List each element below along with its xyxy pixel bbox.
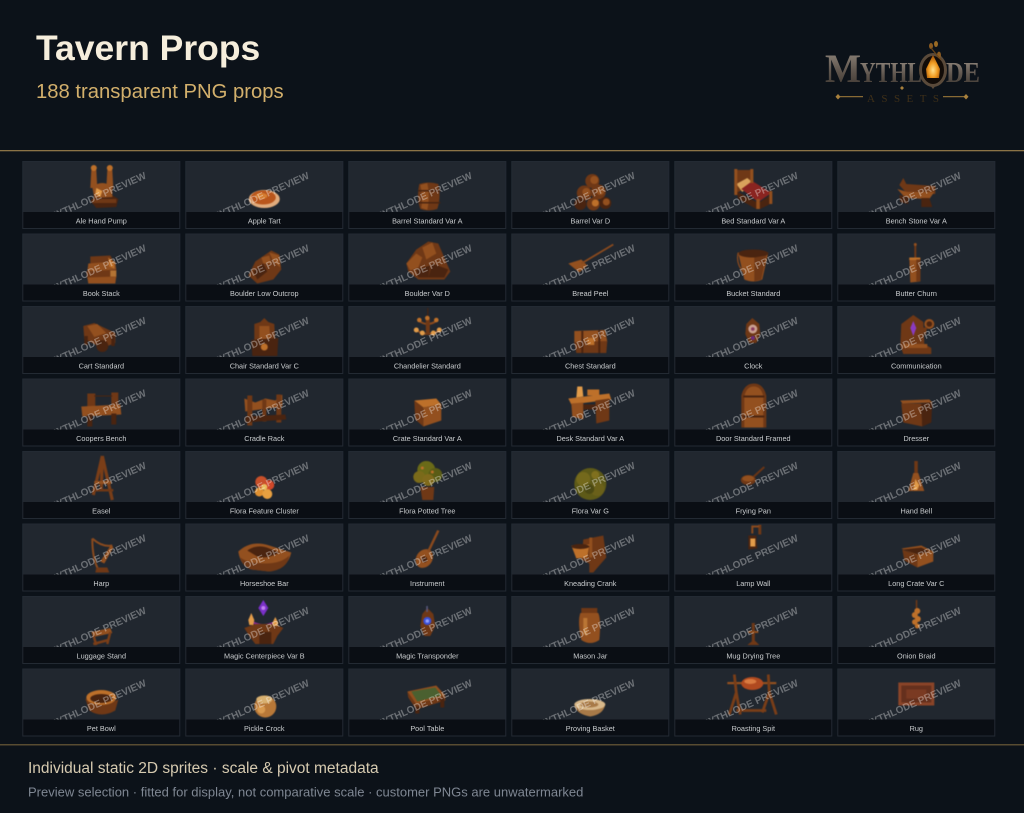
- caption: Flora Potted Tree: [399, 506, 455, 515]
- watermark: MYTHLODE PREVIEW: [863, 388, 964, 441]
- caption bar: [511, 720, 669, 736]
- footer note: Preview selection · fitted for display, not comparative scale · customer PNGs are unwatermarked: [28, 784, 583, 800]
- caption: Barrel Var D: [570, 216, 610, 225]
- watermark: MYTHLODE PREVIEW: [700, 533, 801, 586]
- watermark: MYTHLODE PREVIEW: [211, 171, 312, 224]
- icon: frying pan: [741, 467, 764, 485]
- caption: Harp: [93, 579, 109, 588]
- card: Easel: [22, 451, 180, 519]
- watermark: MYTHLODE PREVIEW: [537, 461, 638, 514]
- caption: Pet Bowl: [87, 724, 116, 733]
- card: Roasting Spit: [674, 668, 832, 736]
- icon: chest: [574, 330, 607, 353]
- caption bar: [837, 647, 995, 664]
- watermark: MYTHLODE PREVIEW: [700, 678, 801, 731]
- logo subtitle: ASSETS: [867, 93, 939, 105]
- card: Cradle Rack: [185, 378, 343, 446]
- icon: flora cluster: [255, 476, 274, 499]
- caption bar: [511, 357, 669, 374]
- caption bar: [511, 647, 669, 664]
- card: Coopers Bench: [22, 378, 180, 446]
- card: Mug Drying Tree: [674, 596, 832, 664]
- icon: book stack: [86, 256, 116, 284]
- icon: hand bell: [908, 461, 924, 491]
- card: Communication: [837, 306, 995, 374]
- icon: desk: [568, 386, 611, 424]
- caption: Horseshoe Bar: [240, 579, 289, 588]
- card: Cart Standard: [22, 306, 180, 374]
- icon: magic transponder: [420, 606, 435, 636]
- card: Desk Standard Var A: [511, 378, 669, 446]
- icon: bucket: [738, 250, 768, 282]
- caption bar: [22, 212, 180, 229]
- caption bar: [348, 574, 506, 592]
- logo wordmark: [825, 46, 980, 91]
- watermark: MYTHLODE PREVIEW: [211, 533, 312, 586]
- card: Clock: [674, 306, 832, 374]
- card: Bucket Standard: [674, 234, 832, 302]
- caption: Bread Peel: [572, 289, 609, 298]
- footer divider: [0, 744, 1024, 745]
- watermark: MYTHLODE PREVIEW: [374, 243, 475, 296]
- caption: Butter Churn: [896, 289, 937, 298]
- icon: roasting spit: [727, 674, 776, 714]
- caption: Boulder Var D: [405, 289, 450, 298]
- caption: Magic Centerpiece Var B: [224, 651, 305, 660]
- watermark: MYTHLODE PREVIEW: [48, 678, 149, 731]
- icon: cradle rack: [244, 394, 286, 426]
- icon: boulder: [248, 250, 281, 284]
- card: Door Standard Framed: [674, 378, 832, 446]
- watermark: MYTHLODE PREVIEW: [374, 388, 475, 441]
- icon: door: [741, 384, 766, 428]
- card: Magic Transponder: [348, 596, 506, 664]
- icon: onion braid: [912, 600, 921, 628]
- icon: kneading crank: [571, 536, 606, 572]
- card: Frying Pan: [674, 451, 832, 519]
- icon: ale hand pump: [90, 165, 118, 208]
- caption: Mason Jar: [573, 651, 608, 660]
- caption: Apple Tart: [248, 216, 281, 225]
- caption: Bed Standard Var A: [721, 216, 785, 225]
- icon: lute: [412, 530, 438, 571]
- icon: butter churn: [909, 243, 920, 282]
- watermark: MYTHLODE PREVIEW: [374, 316, 475, 369]
- caption: Magic Transponder: [396, 651, 459, 660]
- caption bar: [348, 647, 506, 664]
- grid of prop cards: [22, 161, 995, 736]
- icon: apple tart: [249, 190, 280, 208]
- caption bar: [22, 574, 180, 592]
- caption bar: [511, 212, 669, 229]
- watermark: MYTHLODE PREVIEW: [374, 171, 475, 224]
- icon: cart: [83, 323, 115, 352]
- card: Chest Standard: [511, 306, 669, 374]
- caption bar: [185, 647, 343, 664]
- caption bar: [185, 357, 343, 374]
- caption bar: [674, 647, 832, 664]
- icon: bed: [734, 169, 772, 209]
- card: Bench Stone Var A: [837, 161, 995, 229]
- caption: Door Standard Framed: [716, 434, 791, 443]
- card: Mason Jar: [511, 596, 669, 664]
- caption: Coopers Bench: [76, 434, 126, 443]
- card: Pool Table: [348, 668, 506, 736]
- card: Boulder Low Outcrop: [185, 234, 343, 302]
- caption: Flora Feature Cluster: [230, 506, 299, 515]
- caption: Book Stack: [83, 289, 120, 298]
- caption: Chest Standard: [565, 361, 616, 370]
- watermark: MYTHLODE PREVIEW: [537, 678, 638, 731]
- card: Long Crate Var C: [837, 524, 995, 592]
- watermark: MYTHLODE PREVIEW: [537, 606, 638, 659]
- watermark: MYTHLODE PREVIEW: [48, 461, 149, 514]
- card: Chandelier Standard: [348, 306, 506, 374]
- caption bar: [22, 284, 180, 302]
- caption: Kneading Crank: [564, 579, 617, 588]
- icon: long crate: [901, 546, 933, 568]
- watermark: MYTHLODE PREVIEW: [48, 316, 149, 369]
- watermark: MYTHLODE PREVIEW: [211, 316, 312, 369]
- icon: proving basket: [574, 699, 605, 716]
- caption bar: [837, 502, 995, 519]
- caption: Bucket Standard: [726, 289, 780, 298]
- card: Bed Standard Var A: [674, 161, 832, 229]
- caption: Hand Bell: [900, 506, 932, 515]
- watermark: MYTHLODE PREVIEW: [374, 533, 475, 586]
- caption bar: [348, 212, 506, 229]
- icon: mug drying tree: [747, 623, 759, 645]
- caption bar: [22, 647, 180, 664]
- caption: Cart Standard: [79, 361, 124, 370]
- caption bar: [674, 574, 832, 592]
- icon: communication device: [900, 315, 934, 354]
- icon: rug: [898, 682, 934, 706]
- watermark: MYTHLODE PREVIEW: [48, 533, 149, 586]
- watermark: MYTHLODE PREVIEW: [700, 388, 801, 441]
- caption: Pickle Crock: [244, 724, 285, 733]
- caption bar: [185, 284, 343, 302]
- caption: Ale Hand Pump: [76, 216, 127, 225]
- caption bar: [22, 430, 180, 446]
- caption: Dresser: [904, 434, 930, 443]
- icon: barrel stack: [574, 174, 611, 210]
- caption bar: [185, 430, 343, 446]
- caption: Pool Table: [410, 724, 444, 733]
- card: Pickle Crock: [185, 668, 343, 736]
- icon: leafy bush: [574, 468, 606, 500]
- card: Ale Hand Pump: [22, 161, 180, 229]
- caption: Long Crate Var C: [888, 579, 944, 588]
- caption bar: [674, 212, 832, 229]
- caption: Flora Var G: [572, 506, 609, 515]
- card: Lamp Wall: [674, 524, 832, 592]
- icon: bread peel: [568, 244, 613, 272]
- card: Proving Basket: [511, 668, 669, 736]
- caption bar: [511, 502, 669, 519]
- caption bar: [674, 430, 832, 446]
- icon: dresser: [900, 400, 932, 426]
- caption bar: [674, 720, 832, 736]
- watermark: MYTHLODE PREVIEW: [700, 461, 801, 514]
- card: Kneading Crank: [511, 524, 669, 592]
- caption bar: [837, 430, 995, 446]
- watermark: MYTHLODE PREVIEW: [700, 171, 801, 224]
- card: Apple Tart: [185, 161, 343, 229]
- icon: coopers bench: [81, 392, 121, 426]
- caption: Frying Pan: [736, 506, 771, 515]
- card: Crate Standard Var A: [348, 378, 506, 446]
- card: Chair Standard Var C: [185, 306, 343, 374]
- caption: Onion Braid: [897, 651, 936, 660]
- watermark: MYTHLODE PREVIEW: [48, 171, 149, 224]
- icon: luggage stand: [91, 628, 112, 645]
- icon: horseshoe bar: [238, 544, 291, 572]
- icon: clock: [745, 318, 760, 343]
- caption: Desk Standard Var A: [556, 434, 624, 443]
- caption: Boulder Low Outcrop: [230, 289, 299, 298]
- caption bar: [837, 357, 995, 374]
- watermark: MYTHLODE PREVIEW: [537, 388, 638, 441]
- watermark: MYTHLODE PREVIEW: [211, 243, 312, 296]
- caption bar: [674, 357, 832, 374]
- caption bar: [348, 430, 506, 446]
- logo: Mythlode Assets: [825, 41, 980, 105]
- watermark: MYTHLODE PREVIEW: [700, 243, 801, 296]
- caption bar: [348, 502, 506, 519]
- icon: pickle crock: [254, 696, 276, 718]
- watermark: MYTHLODE PREVIEW: [863, 606, 964, 659]
- icon: bench: [897, 178, 935, 207]
- caption bar: [185, 212, 343, 229]
- caption bar: [674, 502, 832, 519]
- card: Flora Var G: [511, 451, 669, 519]
- caption: Crate Standard Var A: [393, 434, 462, 443]
- caption bar: [511, 430, 669, 446]
- logo wordmark: M: [825, 46, 861, 91]
- caption bar: [511, 284, 669, 302]
- card: Harp: [22, 524, 180, 592]
- logo flame emblem: [920, 41, 946, 89]
- watermark: MYTHLODE PREVIEW: [211, 678, 312, 731]
- logo wordmark: YTHL: [860, 57, 922, 89]
- icon: easel: [92, 456, 113, 500]
- card: Bread Peel: [511, 234, 669, 302]
- card: Hand Bell: [837, 451, 995, 519]
- footer headline: Individual static 2D sprites · scale & pivot metadata: [28, 760, 379, 777]
- watermark: MYTHLODE PREVIEW: [211, 606, 312, 659]
- icon: boulder pile: [406, 242, 450, 280]
- watermark: MYTHLODE PREVIEW: [48, 243, 149, 296]
- icon: wall lamp: [748, 524, 761, 550]
- caption: Lamp Wall: [736, 579, 771, 588]
- header divider: [0, 150, 1024, 151]
- caption: Instrument: [410, 579, 445, 588]
- watermark: MYTHLODE PREVIEW: [48, 388, 149, 441]
- card: Barrel Standard Var A: [348, 161, 506, 229]
- caption: Clock: [744, 361, 763, 370]
- icon: magic centerpiece: [244, 600, 283, 644]
- watermark: MYTHLODE PREVIEW: [48, 606, 149, 659]
- caption bar: [185, 502, 343, 519]
- card: Onion Braid: [837, 596, 995, 664]
- caption: Rug: [910, 724, 923, 733]
- icon: pet bowl: [85, 690, 118, 714]
- watermark: MYTHLODE PREVIEW: [863, 461, 964, 514]
- watermark: MYTHLODE PREVIEW: [211, 388, 312, 441]
- caption bar: [511, 574, 669, 592]
- caption: Roasting Spit: [732, 724, 775, 733]
- card: Instrument: [348, 524, 506, 592]
- watermark: MYTHLODE PREVIEW: [537, 533, 638, 586]
- watermark: MYTHLODE PREVIEW: [863, 316, 964, 369]
- card: Rug: [837, 668, 995, 736]
- card: Barrel Var D: [511, 161, 669, 229]
- watermark: MYTHLODE PREVIEW: [537, 243, 638, 296]
- caption bar: [348, 720, 506, 736]
- watermark: MYTHLODE PREVIEW: [211, 461, 312, 514]
- card: Horseshoe Bar: [185, 524, 343, 592]
- watermark: MYTHLODE PREVIEW: [863, 243, 964, 296]
- icon: throne chair: [251, 318, 278, 356]
- icon: pool table: [407, 686, 445, 714]
- watermark: MYTHLODE PREVIEW: [537, 171, 638, 224]
- watermark: MYTHLODE PREVIEW: [700, 316, 801, 369]
- caption bar: [185, 574, 343, 592]
- card: Magic Centerpiece Var B: [185, 596, 343, 664]
- caption: Chair Standard Var C: [230, 361, 299, 370]
- card: Dresser: [837, 378, 995, 446]
- card: Pet Bowl: [22, 668, 180, 736]
- caption: Proving Basket: [566, 724, 615, 733]
- caption bar: [674, 284, 832, 302]
- caption bar: [22, 357, 180, 374]
- caption: Bench Stone Var A: [886, 216, 947, 225]
- caption: Easel: [92, 506, 111, 515]
- card: Butter Churn: [837, 234, 995, 302]
- caption: Mug Drying Tree: [726, 651, 780, 660]
- icon: potted tree: [413, 461, 442, 500]
- card: Luggage Stand: [22, 596, 180, 664]
- icon: barrel: [418, 182, 440, 210]
- title: Tavern Props: [36, 28, 260, 68]
- icon: crate: [414, 398, 441, 426]
- caption bar: [837, 574, 995, 592]
- caption: Communication: [891, 361, 942, 370]
- watermark: MYTHLODE PREVIEW: [863, 678, 964, 731]
- caption bar: [348, 284, 506, 302]
- card: Book Stack: [22, 234, 180, 302]
- caption: Chandelier Standard: [394, 361, 461, 370]
- watermark: MYTHLODE PREVIEW: [374, 606, 475, 659]
- logo ornaments: [836, 86, 968, 100]
- caption bar: [22, 720, 180, 736]
- card: Flora Potted Tree: [348, 451, 506, 519]
- caption bar: [837, 284, 995, 302]
- caption bar: [837, 212, 995, 229]
- caption bar: [22, 502, 180, 519]
- icon: harp: [92, 538, 113, 572]
- logo wordmark: DE: [946, 57, 980, 89]
- icon: mason jar: [579, 608, 600, 643]
- watermark: MYTHLODE PREVIEW: [537, 316, 638, 369]
- watermark: MYTHLODE PREVIEW: [863, 171, 964, 224]
- caption bar: [837, 720, 995, 736]
- subtitle: 188 transparent PNG props: [36, 81, 284, 103]
- icon: chandelier: [414, 308, 442, 336]
- caption: Luggage Stand: [77, 651, 126, 660]
- caption bar: [348, 357, 506, 374]
- card: Flora Feature Cluster: [185, 451, 343, 519]
- caption: Barrel Standard Var A: [392, 216, 463, 225]
- caption bar: [185, 720, 343, 736]
- watermark: MYTHLODE PREVIEW: [374, 461, 475, 514]
- watermark: MYTHLODE PREVIEW: [374, 678, 475, 731]
- card: Boulder Var D: [348, 234, 506, 302]
- caption: Cradle Rack: [244, 434, 285, 443]
- watermark: MYTHLODE PREVIEW: [863, 533, 964, 586]
- watermark: MYTHLODE PREVIEW: [700, 606, 801, 659]
